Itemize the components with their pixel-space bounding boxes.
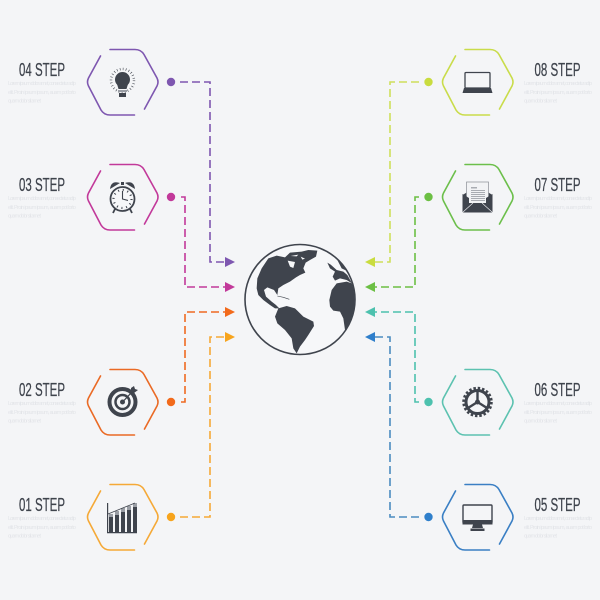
description 01: Lorem ipsum dolor amet, consectetur adip bbox=[8, 516, 76, 522]
description 05: elit. Proin ipsum ipsum, auam pot lorto bbox=[524, 525, 592, 531]
description 02 bbox=[8, 401, 76, 424]
step 03 bbox=[8, 164, 158, 230]
step 04 bbox=[8, 50, 158, 115]
step 01 bbox=[8, 484, 158, 550]
step 07 bbox=[442, 164, 592, 230]
description 01 bbox=[8, 516, 76, 540]
description 08: quam dolor sit amet bbox=[524, 98, 557, 104]
hexagon 07 bbox=[442, 164, 513, 230]
description 04: Lorem ipsum dolor amet, consectetur adip bbox=[8, 81, 76, 87]
hexagon 02 bbox=[88, 370, 158, 435]
description 02: quam dolor sit amet bbox=[8, 418, 41, 424]
description 06: quam dolor sit amet bbox=[524, 418, 557, 424]
description 04: quam dolor sit amet bbox=[8, 98, 41, 104]
description 05 bbox=[524, 516, 592, 540]
step 08 bbox=[442, 50, 592, 115]
description 08: Lorem ipsum dolor amet, consectetur adip bbox=[524, 81, 592, 87]
description 08 bbox=[524, 81, 592, 104]
icon: laptop bbox=[462, 72, 492, 93]
description 07: Lorem ipsum dolor amet, consectetur adip bbox=[524, 196, 592, 202]
description 07: quam dolor sit amet bbox=[524, 214, 557, 220]
icon: bar chart bbox=[107, 503, 137, 533]
description 06: elit. Proin ipsum ipsum, auam pot lorto bbox=[524, 410, 592, 416]
hexagon 06 bbox=[442, 370, 513, 435]
icon: open envelope bbox=[462, 182, 492, 212]
icon: target bbox=[110, 386, 138, 415]
heading 03: 03 STEP bbox=[19, 175, 65, 195]
description 04: elit. Proin ipsum ipsum, auam pot lorto bbox=[8, 90, 76, 96]
description 06: Lorem ipsum dolor amet, consectetur adip bbox=[524, 401, 592, 407]
hexagon 03 bbox=[88, 164, 158, 230]
connector 03 pink bbox=[167, 193, 235, 292]
description 02: elit. Proin ipsum ipsum, auam pot lorto bbox=[8, 410, 76, 416]
icon: alarm clock bbox=[110, 182, 135, 213]
hexagon 08 bbox=[442, 50, 513, 115]
connector 06 teal bbox=[365, 307, 433, 406]
globe bbox=[245, 244, 357, 354]
step 06 bbox=[442, 370, 592, 435]
connector 07 green bbox=[365, 193, 433, 292]
icon: desktop monitor bbox=[462, 505, 492, 531]
hexagon 01 bbox=[88, 484, 158, 550]
description 08: elit. Proin ipsum ipsum, auam pot lorto bbox=[524, 90, 592, 96]
hexagon 04 bbox=[88, 50, 158, 115]
description 01: elit. Proin ipsum ipsum, auam pot lorto bbox=[8, 525, 76, 531]
step 05 bbox=[442, 484, 592, 550]
description 03 bbox=[8, 196, 76, 220]
description 04 bbox=[8, 81, 76, 104]
connector 01 amber bbox=[167, 332, 235, 521]
description 03: elit. Proin ipsum ipsum, auam pot lorto bbox=[8, 205, 76, 211]
description 05: Lorem ipsum dolor amet, consectetur adip bbox=[524, 516, 592, 522]
step 02 bbox=[8, 370, 158, 435]
description 07 bbox=[524, 196, 592, 220]
description 05: quam dolor sit amet bbox=[524, 534, 557, 540]
heading 01: 01 STEP bbox=[19, 495, 65, 515]
heading 02: 02 STEP bbox=[19, 380, 65, 400]
icon: light bulb bbox=[111, 69, 134, 97]
connector 04 purple bbox=[167, 78, 235, 267]
icon: gear bbox=[464, 388, 491, 416]
description 06 bbox=[524, 401, 592, 424]
description 02: Lorem ipsum dolor amet, consectetur adip bbox=[8, 401, 76, 407]
connector 05 blue bbox=[365, 332, 433, 521]
hexagon 05 bbox=[442, 484, 513, 550]
connector 08 lime bbox=[365, 78, 433, 267]
description 01: quam dolor sit amet bbox=[8, 534, 41, 540]
description 03: Lorem ipsum dolor amet, consectetur adip bbox=[8, 196, 76, 202]
description 03: quam dolor sit amet bbox=[8, 214, 41, 220]
connector 02 orange bbox=[167, 307, 235, 406]
description 07: elit. Proin ipsum ipsum, auam pot lorto bbox=[524, 205, 592, 211]
heading 04: 04 STEP bbox=[19, 60, 65, 80]
